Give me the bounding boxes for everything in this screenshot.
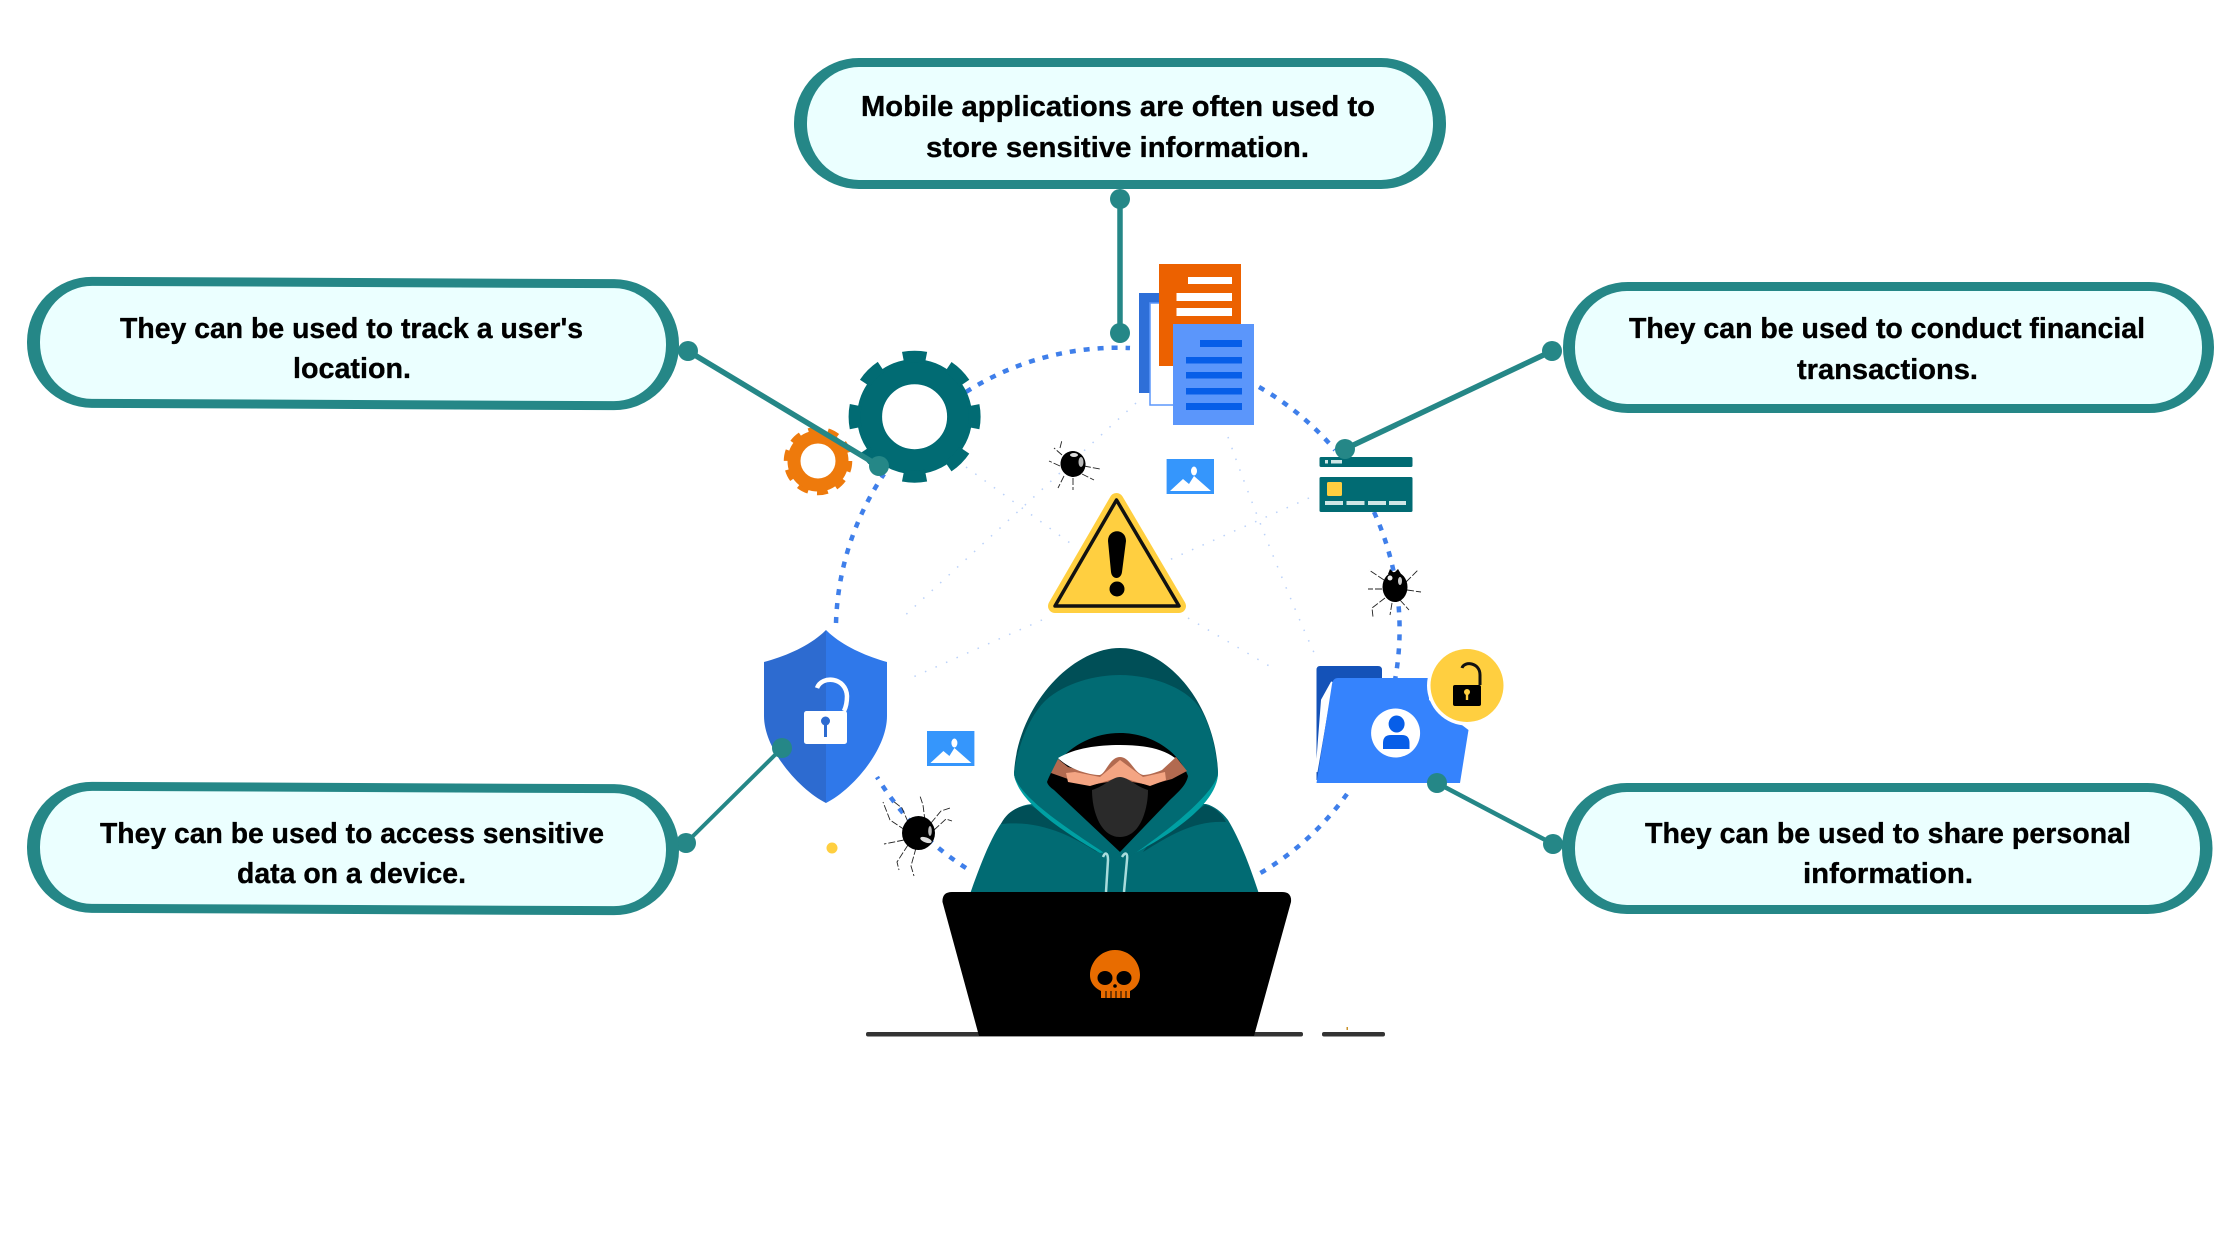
callout: conduct financial transactions [1563, 282, 2214, 413]
icon: bug on the right of circle [1368, 569, 1421, 617]
icon: picture bottom [927, 731, 974, 766]
goggles [1058, 745, 1175, 775]
laptop [942, 892, 1291, 1036]
icon: folder with user [1316, 666, 1468, 783]
callout: access sensitive data [27, 782, 679, 915]
connector: personal information [1427, 773, 1563, 854]
icon: warning triangle [1055, 500, 1179, 606]
hood main [1014, 675, 1218, 858]
icon: credit card [1320, 457, 1412, 512]
desk lines [866, 1027, 1385, 1036]
icon: small orange gear [786, 429, 850, 493]
icon: bug upper left [1049, 440, 1100, 490]
callout: store sensitive information: Mobile applications are often used to [861, 91, 1375, 123]
callout: store sensitive information: store sensitive information. [926, 132, 1309, 164]
callout: conduct financial transactions: They can be used to conduct financial [1629, 313, 2145, 345]
callout: track location: location. [293, 353, 411, 385]
hoodie body [970, 804, 1259, 894]
callout: share personal information [1562, 783, 2212, 914]
hood trim [1014, 773, 1218, 853]
skull logo [1090, 950, 1140, 998]
face opening [1047, 733, 1188, 852]
skin [1066, 760, 1166, 786]
connector: financial transactions [1335, 341, 1562, 459]
icon: large teal gear [844, 346, 985, 487]
callout: access sensitive data: data on a device. [237, 858, 466, 890]
icon: shield with open padlock [764, 630, 887, 803]
callout: conduct financial transactions: transactions. [1797, 354, 1978, 386]
callout: store sensitive information [794, 58, 1446, 189]
dotted circle around the hacker [836, 348, 1400, 875]
connector: track location [678, 341, 889, 476]
icon: yellow open padlock badge [1427, 646, 1507, 726]
callout: track location [27, 277, 679, 410]
icon: documents [1139, 264, 1254, 425]
face mask [1092, 777, 1148, 837]
connector: sensitive data [676, 738, 792, 853]
hood outer shadow [1014, 648, 1218, 856]
callout: share personal information: They can be used to share personal [1645, 818, 2131, 850]
faint dotted network lines [900, 403, 1316, 678]
callout: access sensitive data: They can be used to access sensitive [100, 818, 604, 850]
drawstrings [1103, 854, 1127, 892]
connector: top callout [1110, 189, 1130, 343]
icon: picture top [1167, 459, 1214, 494]
callout: share personal information: information. [1803, 858, 1973, 890]
icon: spider lower left [883, 796, 952, 876]
skin shadow [1051, 757, 1187, 785]
hacker figure [970, 648, 1259, 894]
decorative yellow dot [826, 842, 838, 854]
callout: track location: They can be used to track a user's [120, 313, 583, 345]
hoodie shoulder shadow [1001, 805, 1226, 852]
